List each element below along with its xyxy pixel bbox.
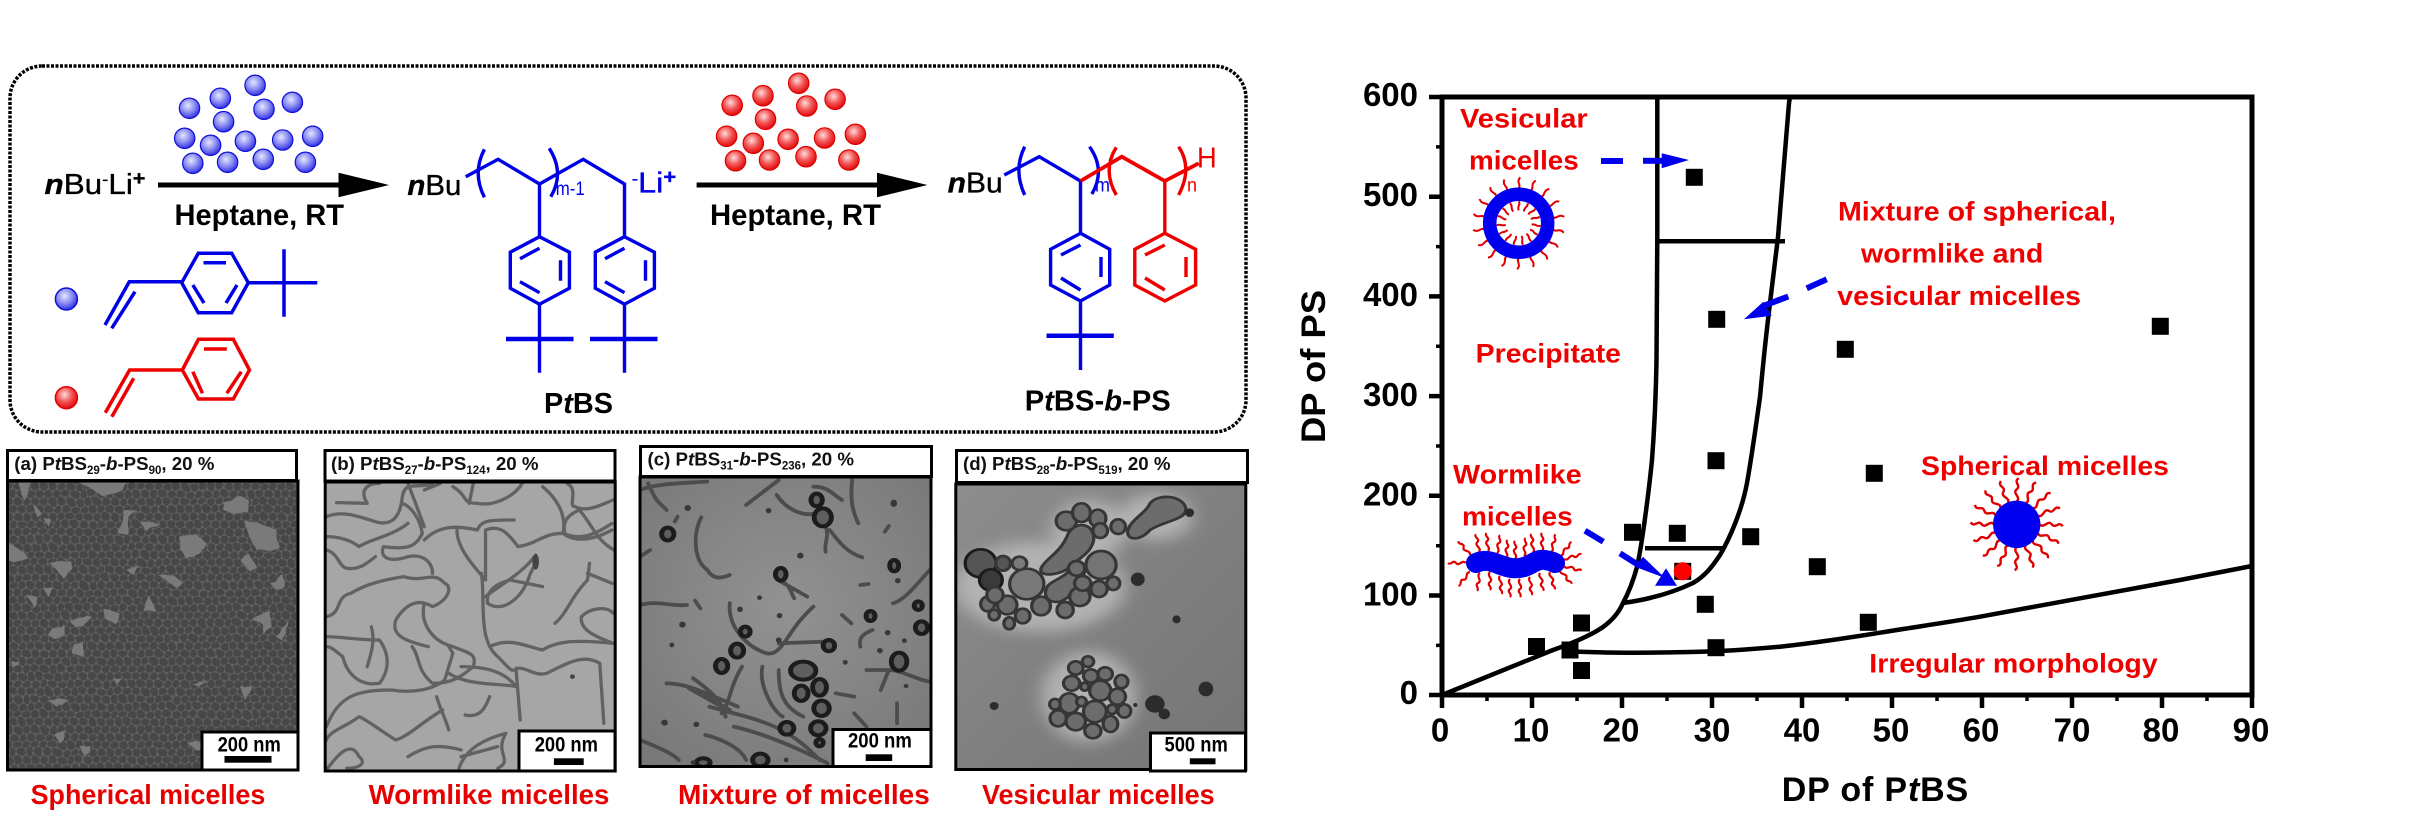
image frame c — [640, 477, 931, 766]
panel: TEM (a) spherical micelles — [6, 450, 299, 771]
caption box d: - — [1050, 453, 1056, 474]
scale bar a: 200 nm — [218, 734, 281, 757]
caption: wormlike micelles: Wormlike micelles — [369, 779, 609, 810]
x tick labels: 90 — [2233, 712, 2269, 749]
caption box d: b-PS — [1056, 453, 1098, 474]
scale bar b — [519, 731, 615, 771]
x axis title: DP of PtBS — [1782, 771, 1968, 809]
structure: PtBS living polymer: m-1 — [556, 179, 585, 200]
caption box a: (a) PtBS — [14, 453, 87, 474]
caption box d — [956, 450, 1248, 482]
caption box a: 29 — [87, 465, 100, 477]
data points — [1528, 169, 2169, 679]
icon: blue monomer spheres — [174, 75, 323, 174]
initiator label: - — [102, 170, 108, 189]
micrograph d — [954, 483, 1247, 770]
image frame d — [956, 484, 1246, 770]
label: vesicular micelles: Vesicular — [1460, 104, 1588, 134]
caption box b: - — [418, 453, 424, 474]
structure: PtBS-b-PS block copolymer: m — [1095, 176, 1110, 197]
reaction condition: Heptane, RT — [174, 199, 344, 232]
scale bar b: 200 nm — [535, 734, 598, 757]
caption box b: (b) PtBS — [331, 453, 405, 474]
image frame a — [8, 481, 298, 770]
x tick labels: 60 — [1963, 712, 1999, 749]
x tick labels: 10 — [1513, 712, 1549, 749]
label: precipitate: Precipitate — [1476, 339, 1621, 369]
caption box a: 90 — [149, 465, 161, 477]
structure: PtBS-b-PS block copolymer: nBu — [948, 168, 1003, 200]
caption box c: 236 — [782, 460, 801, 472]
caption box b: 124 — [466, 465, 486, 477]
icon: wormlike micelle — [1448, 533, 1582, 597]
phase boundary curves — [1442, 97, 2252, 695]
y tick labels: 500 — [1363, 176, 1418, 213]
label: vesicular micelles: micelles — [1469, 145, 1579, 175]
highlighted data point — [1674, 562, 1692, 580]
label: wormlike micelles — [1453, 459, 1582, 531]
dotted rounded frame — [10, 66, 1246, 432]
caption box d: (d) PtBS — [963, 453, 1037, 474]
caption box a: b-PS — [106, 453, 149, 474]
icon: blue monomer legend sphere — [55, 288, 77, 310]
scale bar d — [1150, 733, 1246, 771]
caption box d: 519 — [1098, 465, 1118, 477]
initiator label: nBu — [44, 169, 99, 201]
scale bar c — [833, 729, 931, 766]
y tick labels: 0 — [1400, 674, 1418, 711]
micrograph a — [6, 480, 299, 771]
caption box d: , 20 % — [1118, 453, 1171, 474]
y tick labels: 200 — [1363, 476, 1418, 513]
caption box b: 27 — [405, 465, 418, 477]
micrograph b — [324, 481, 616, 772]
panel: TEM (d) vesicular micelles — [954, 450, 1248, 771]
y tick labels: 400 — [1363, 276, 1418, 313]
scale bar d: 500 nm — [1164, 734, 1228, 757]
caption box b: b-PS — [424, 453, 466, 474]
y axis title: DP of PS — [1295, 290, 1333, 443]
structure: PtBS living polymer: + — [663, 167, 676, 189]
arrow: first reaction — [158, 173, 389, 197]
y tick labels — [1363, 76, 1418, 711]
arrow: second reaction — [697, 173, 927, 197]
structure: PtBS living polymer: - — [632, 170, 638, 189]
label: mixture region: Mixture of spherical, — [1838, 197, 2116, 227]
structure: PtBS living polymer — [407, 148, 676, 373]
micrograph c — [640, 477, 932, 768]
icon: spherical micelle — [1971, 478, 2063, 570]
reaction condition: Heptane, RT — [710, 199, 881, 232]
arrow: mixture pointer — [1744, 279, 1827, 319]
arrow: vesicular pointer — [1601, 153, 1689, 168]
x tick labels: 30 — [1694, 712, 1730, 749]
caption: vesicular micelles: Vesicular micelles — [982, 779, 1215, 810]
x tick labels: 50 — [1873, 712, 1909, 749]
scale bar c: 200 nm — [848, 729, 912, 752]
caption box c: b-PS — [739, 448, 782, 470]
panel: synthesis scheme — [10, 66, 1246, 432]
x tick labels: 0 — [1431, 712, 1449, 749]
icon: red monomer legend sphere — [55, 387, 77, 409]
axis ticks — [1429, 97, 2252, 708]
structure: PtBS living polymer: Li — [638, 168, 663, 200]
label: PtBS: PtBS — [544, 388, 613, 420]
structure: PtBS-b-PS block copolymer — [948, 142, 1217, 370]
label: irregular morphology: Irregular morphology — [1869, 648, 2158, 678]
caption box a — [8, 450, 296, 480]
y tick labels: 300 — [1363, 376, 1418, 413]
caption box b: , 20 % — [486, 453, 539, 474]
icon: vesicle — [1473, 177, 1564, 269]
caption box a: - — [100, 453, 106, 474]
y tick labels: 100 — [1363, 576, 1418, 613]
panel: TEM (b) wormlike micelles — [324, 450, 616, 772]
structure: styrene monomer — [105, 339, 250, 417]
arrow: wormlike pointer — [1585, 531, 1677, 586]
label: mixture region: wormlike and — [1860, 239, 2043, 269]
label: vesicular micelles — [1460, 104, 1588, 175]
caption box a: , 20 % — [161, 453, 215, 474]
label: mixture region — [1837, 197, 2116, 311]
icon: red monomer spheres — [716, 73, 866, 171]
scale bar a — [202, 732, 298, 770]
structure: PtBS-b-PS block copolymer: H — [1197, 142, 1217, 174]
x tick labels — [1431, 712, 2269, 749]
caption box d: 28 — [1037, 465, 1050, 477]
caption box b — [325, 450, 615, 481]
x tick labels: 20 — [1603, 712, 1639, 749]
label: mixture region: vesicular micelles — [1837, 281, 2081, 311]
caption box c: (c) PtBS — [648, 448, 720, 470]
panel: TEM (c) mixture of micelles — [640, 446, 932, 768]
caption box c: - — [733, 448, 739, 470]
structure: PtBS living polymer: nBu — [407, 170, 461, 202]
caption box c — [640, 446, 932, 476]
caption: spherical micelles: Spherical micelles — [31, 779, 265, 810]
structure: tert-butylstyrene monomer — [105, 249, 317, 328]
x tick labels: 70 — [2054, 712, 2090, 749]
structure: PtBS-b-PS block copolymer: n — [1187, 176, 1197, 197]
caption: mixture of micelles: Mixture of micelles — [678, 779, 930, 810]
y tick labels: 600 — [1363, 76, 1418, 113]
label: wormlike micelles: micelles — [1462, 501, 1573, 531]
label: spherical micelles: Spherical micelles — [1921, 451, 2169, 481]
label: wormlike micelles: Wormlike — [1453, 459, 1582, 489]
caption box c: 31 — [720, 460, 734, 472]
image frame b — [325, 482, 615, 771]
initiator label: Li — [108, 169, 133, 201]
label: PtBS-b-PS: PtBS-b-PS — [1025, 386, 1171, 418]
initiator label: + — [133, 168, 146, 190]
chart: morphology phase diagram — [1295, 76, 2269, 809]
x tick labels: 80 — [2143, 712, 2179, 749]
x tick labels: 40 — [1784, 712, 1820, 749]
caption box c: , 20 % — [801, 448, 854, 470]
plot frame — [1442, 97, 2252, 695]
